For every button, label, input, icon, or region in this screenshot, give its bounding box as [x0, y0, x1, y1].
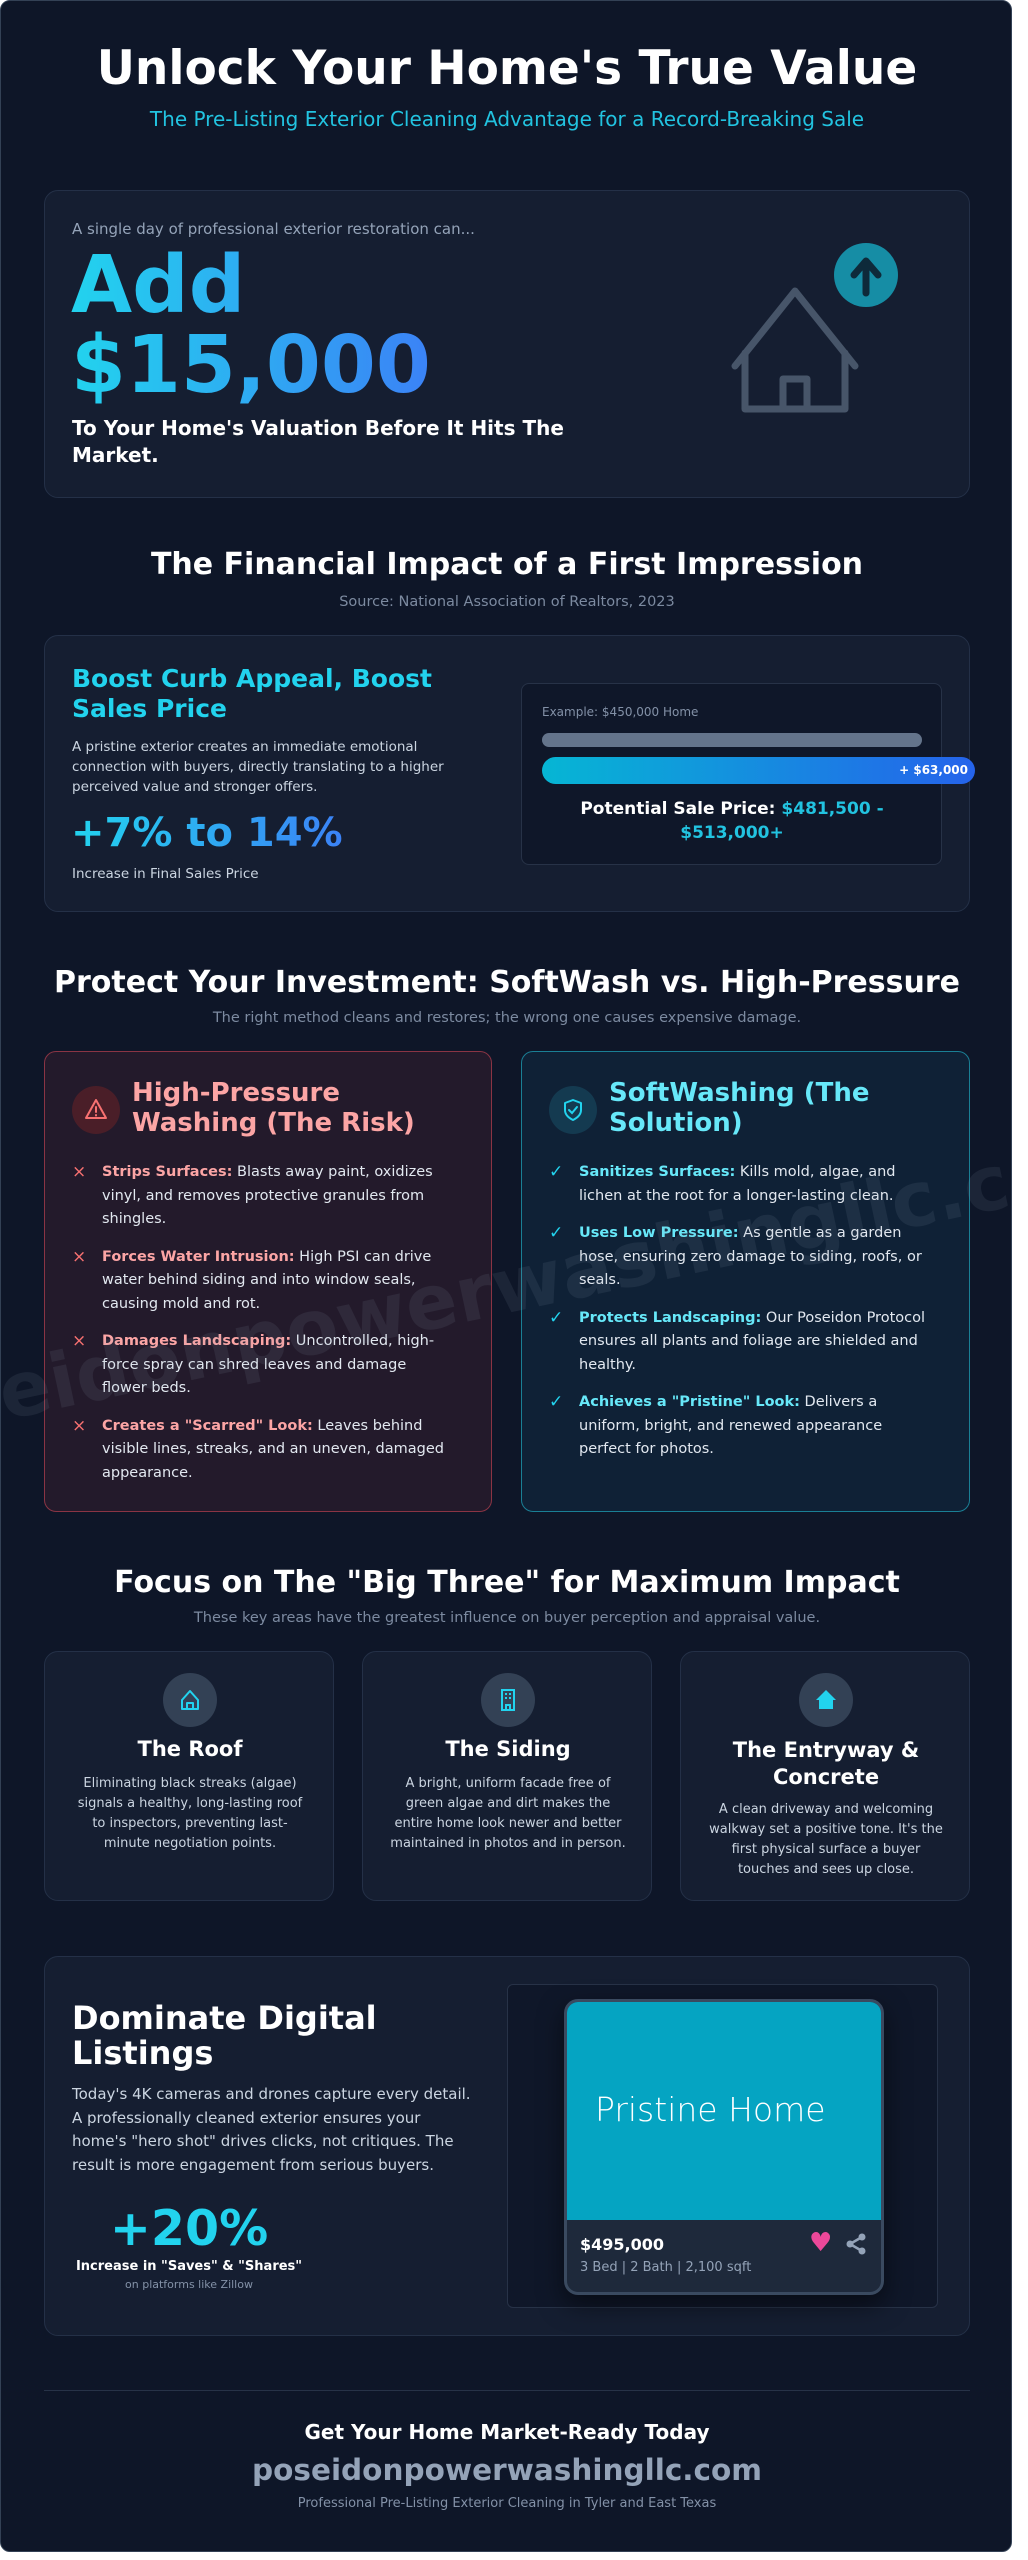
benefit list: ✓: [549, 1223, 563, 1243]
icon: home: [799, 1673, 853, 1727]
listing mockup: [507, 1984, 938, 2308]
hero caption: To Your Home's Valuation Before It Hits The Market.: [72, 416, 564, 467]
icon: heart: ♥: [809, 2228, 832, 2258]
benefit list: [549, 1162, 925, 1457]
big number: $15,000: [71, 319, 431, 411]
risk list: Damages Landscaping: Uncontrolled, high-force spray can shred leaves and damage flower beds.: [102, 1333, 434, 1396]
panel: digital listings: [44, 1956, 970, 2336]
price: $495,000: [580, 2235, 664, 2254]
heading: SoftWashing (The Solution): [609, 1078, 869, 1138]
big number: Add: [71, 239, 245, 331]
stat: +20%: on platforms like Zillow: [125, 2278, 253, 2291]
risk list: Creates a "Scarred" Look: Leaves behind visible lines, streaks, and an uneven, damaged appearance.: [102, 1418, 444, 1480]
url: poseidonpowerwashingllc.com: [252, 2453, 762, 2487]
icon: warning: [72, 1086, 120, 1134]
panel: roof: [44, 1651, 334, 1901]
benefit list: Achieves a "Pristine" Look: Delivers a uniform, bright, and renewed appearance perfect for photos.: [579, 1394, 882, 1457]
intro text: A single day of professional exterior restoration can...: [72, 220, 475, 238]
panel: high pressure risk: [44, 1051, 492, 1512]
heading: Boost Curb Appeal, Boost Sales Price: [72, 664, 432, 723]
stat: +20%: [76, 2200, 302, 2291]
icon: building: [481, 1673, 535, 1727]
description: A clean driveway and welcoming walkway set a positive tone. It's the first physical surface a buyer touches and sees up close.: [709, 1802, 943, 1877]
chart label: Example: $450,000 Home: [542, 705, 698, 719]
title: The Siding: [445, 1737, 571, 1761]
panel: hero value: [44, 190, 970, 498]
panel: siding: [362, 1651, 652, 1901]
stat: +20%: +20%: [110, 2200, 268, 2257]
bar: base: [542, 733, 922, 747]
footer: [252, 2420, 762, 2511]
heading: financial impact: The Financial Impact of a First Impression: [151, 547, 863, 582]
icon: share: [846, 2234, 866, 2254]
heading: big three: Focus on The "Big Three" for Maximum Impact: [114, 1565, 900, 1600]
risk list: Strips Surfaces: Blasts away paint, oxidizes vinyl, and removes protective granules from shingles.: [102, 1164, 433, 1227]
benefit list: ✓: [549, 1308, 563, 1328]
benefit list: ✓: [549, 1162, 563, 1182]
subheading: These key areas have the greatest influence on buyer perception and appraisal value.: [194, 1610, 820, 1626]
big number: [71, 245, 431, 405]
heading: High-Pressure Washing (The Risk): [132, 1078, 415, 1138]
heading: Dominate Digital Listings: [72, 1999, 377, 2072]
icon: shield: [549, 1086, 597, 1134]
icon: house with up arrow: [732, 243, 898, 412]
cta: Get Your Home Market-Ready Today: [304, 2420, 710, 2444]
photo area: Pristine Home: [595, 2090, 826, 2129]
panel: entryway: [680, 1651, 970, 1901]
title: The Entryway & Concrete: [733, 1738, 919, 1789]
body text: Today's 4K cameras and drones capture every detail. A professionally cleaned exterior ensures your home's "hero shot" drives clicks, not critiques. The result is more engagement from serious buyers.: [72, 2085, 471, 2174]
risk list: ×: [72, 1246, 86, 1266]
panel: curb appeal: [44, 635, 970, 912]
source: Source: National Association of Realtors, 2023: [339, 594, 675, 610]
photo area: [567, 2002, 881, 2220]
icon: roof: [163, 1673, 217, 1727]
risk list: [72, 1162, 444, 1480]
title: Unlock Your Home's True Value: [97, 41, 917, 96]
body text: A pristine exterior creates an immediate emotional connection with buyers, directly translating to a higher perceived value and stronger offers.: [72, 739, 444, 795]
benefit list: Uses Low Pressure: As gentle as a garden hose, ensuring zero damage to siding, roofs, or seals.: [579, 1225, 922, 1288]
stat: +7% to 14%: [71, 810, 343, 856]
risk list: ×: [72, 1162, 86, 1182]
benefit list: ✓: [549, 1392, 563, 1412]
description: Eliminating black streaks (algae) signals a healthy, long-lasting roof to inspectors, preventing last-minute negotiation points.: [78, 1776, 302, 1851]
details: 3 Bed | 2 Bath | 2,100 sqft: [580, 2260, 751, 2275]
bar: increased: + $63,000: [899, 763, 968, 777]
description: A bright, uniform facade free of green algae and dirt makes the entire home look newer and better maintained in photos and in person.: [390, 1776, 626, 1851]
stat: +20%: Increase in "Saves" & "Shares": [76, 2259, 302, 2274]
risk list: ×: [72, 1416, 86, 1436]
heading: softwash vs pressure: Protect Your Investment: SoftWash vs. High-Pressure: [54, 965, 960, 1000]
risk list: ×: [72, 1331, 86, 1351]
stat caption: Increase in Final Sales Price: [72, 866, 259, 882]
bar chart: [521, 683, 942, 865]
benefit list: Sanitizes Surfaces: Kills mold, algae, and lichen at the root for a longer-lasting clean.: [579, 1164, 896, 1204]
phone card: [564, 1999, 884, 2295]
subheading: The right method cleans and restores; the wrong one causes expensive damage.: [213, 1010, 801, 1026]
subtitle: The Pre-Listing Exterior Cleaning Advantage for a Record-Breaking Sale: [150, 107, 864, 131]
panel: softwash solution: [521, 1051, 970, 1512]
tagline: Professional Pre-Listing Exterior Cleaning in Tyler and East Texas: [298, 2496, 716, 2511]
title: The Roof: [138, 1737, 242, 1761]
bar: increased: [542, 757, 975, 784]
benefit list: Protects Landscaping: Our Poseidon Protocol ensures all plants and foliage are shielded and healthy.: [579, 1310, 925, 1372]
risk list: Forces Water Intrusion: High PSI can drive water behind siding and into window seals, causing mold and rot.: [102, 1248, 431, 1312]
potential price: Potential Sale Price: $481,500 - $513,000+: [580, 799, 884, 843]
